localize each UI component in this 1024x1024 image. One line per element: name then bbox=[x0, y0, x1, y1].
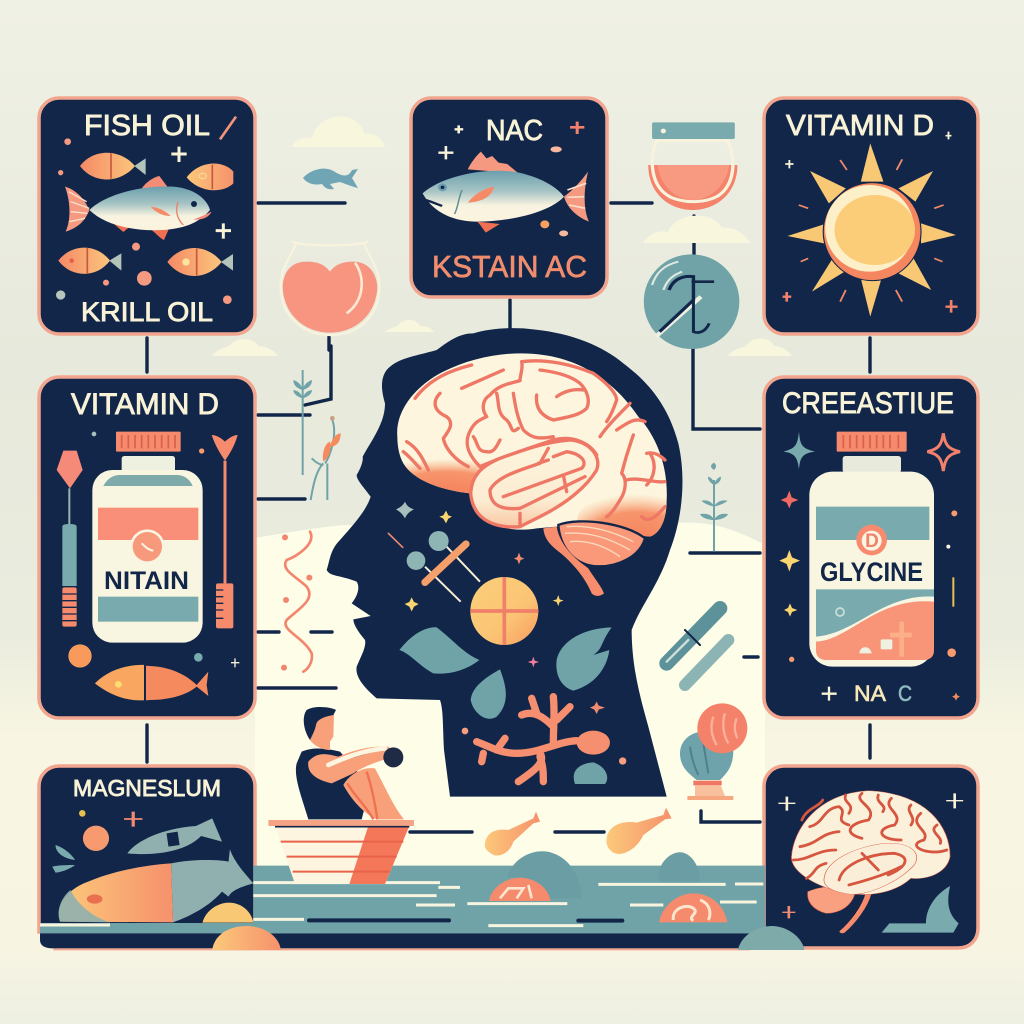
brain stem bbox=[543, 527, 604, 596]
bottle label text: GLYCINE bbox=[820, 557, 923, 587]
panel: creeastiue bbox=[764, 377, 978, 718]
pills and rods bbox=[388, 531, 480, 602]
plant: left bbox=[293, 370, 312, 475]
NAC drawings bbox=[421, 122, 589, 236]
drumstick right bbox=[606, 808, 672, 854]
man figure bbox=[296, 707, 404, 819]
icon: teal circle bbox=[644, 254, 739, 349]
brain panel drawings bbox=[778, 791, 963, 933]
panel: magnesium bbox=[39, 766, 255, 932]
teal bust bbox=[680, 703, 747, 800]
dots bbox=[462, 728, 626, 765]
teal ball bbox=[738, 926, 804, 950]
gyri lines bbox=[403, 361, 665, 519]
icon: brain domes bbox=[489, 878, 727, 922]
small background fish bbox=[303, 169, 358, 189]
temporal lobe bbox=[471, 440, 598, 527]
water band bbox=[40, 866, 765, 949]
panel: vitamin D bottle bbox=[39, 377, 255, 718]
cerebellum bbox=[558, 521, 645, 566]
fish oil drawings bbox=[56, 117, 236, 304]
D badge letter: D bbox=[865, 531, 879, 552]
drumstick left bbox=[485, 812, 540, 856]
gold ball bbox=[212, 926, 281, 950]
head illustration bbox=[327, 328, 697, 797]
plant: wheat bbox=[311, 416, 341, 500]
head silhouette bbox=[327, 328, 682, 797]
central cream backdrop bbox=[255, 522, 765, 870]
clouds bbox=[212, 116, 792, 356]
icon: glass left bbox=[281, 242, 379, 335]
squiggle lines bbox=[281, 532, 312, 672]
heading: fish oil: FISH OIL bbox=[84, 110, 210, 142]
bottle label text: NITAIN bbox=[104, 567, 189, 595]
panel: brain bbox=[764, 766, 978, 948]
icon: teal domes bbox=[507, 851, 700, 898]
brain bbox=[397, 353, 667, 596]
caption: NA bbox=[854, 681, 886, 706]
leaves bbox=[399, 627, 612, 784]
heading: CREEASTIUE bbox=[782, 387, 954, 420]
capsules bbox=[667, 608, 728, 685]
heading: vitamin D: VITAMIN D bbox=[786, 110, 934, 142]
bottle and tools bbox=[57, 432, 239, 702]
sparkles bbox=[396, 502, 605, 714]
icon: sun bbox=[783, 132, 958, 317]
heading: NAC: NAC bbox=[486, 115, 543, 147]
icon: glass top bbox=[648, 122, 737, 210]
heading: VITAMIN D bbox=[71, 388, 219, 421]
caption letter: C bbox=[898, 681, 912, 706]
panel: fish oil bbox=[39, 98, 255, 334]
heading: MAGNESLUM bbox=[73, 775, 221, 801]
boat bbox=[268, 820, 414, 884]
heading: kstain ac: KSTAIN AC bbox=[432, 249, 587, 284]
coral nerve bbox=[477, 697, 610, 782]
bottle and stars bbox=[779, 432, 960, 701]
panel: vitamin D sun bbox=[764, 98, 978, 334]
magnesium drawings bbox=[52, 810, 253, 923]
icon: tablet bbox=[470, 577, 538, 645]
panel: NAC bbox=[411, 98, 607, 297]
heading: krill oil: KRILL OIL bbox=[81, 297, 213, 327]
connector lines bbox=[147, 203, 870, 832]
plant: right bbox=[700, 463, 728, 552]
